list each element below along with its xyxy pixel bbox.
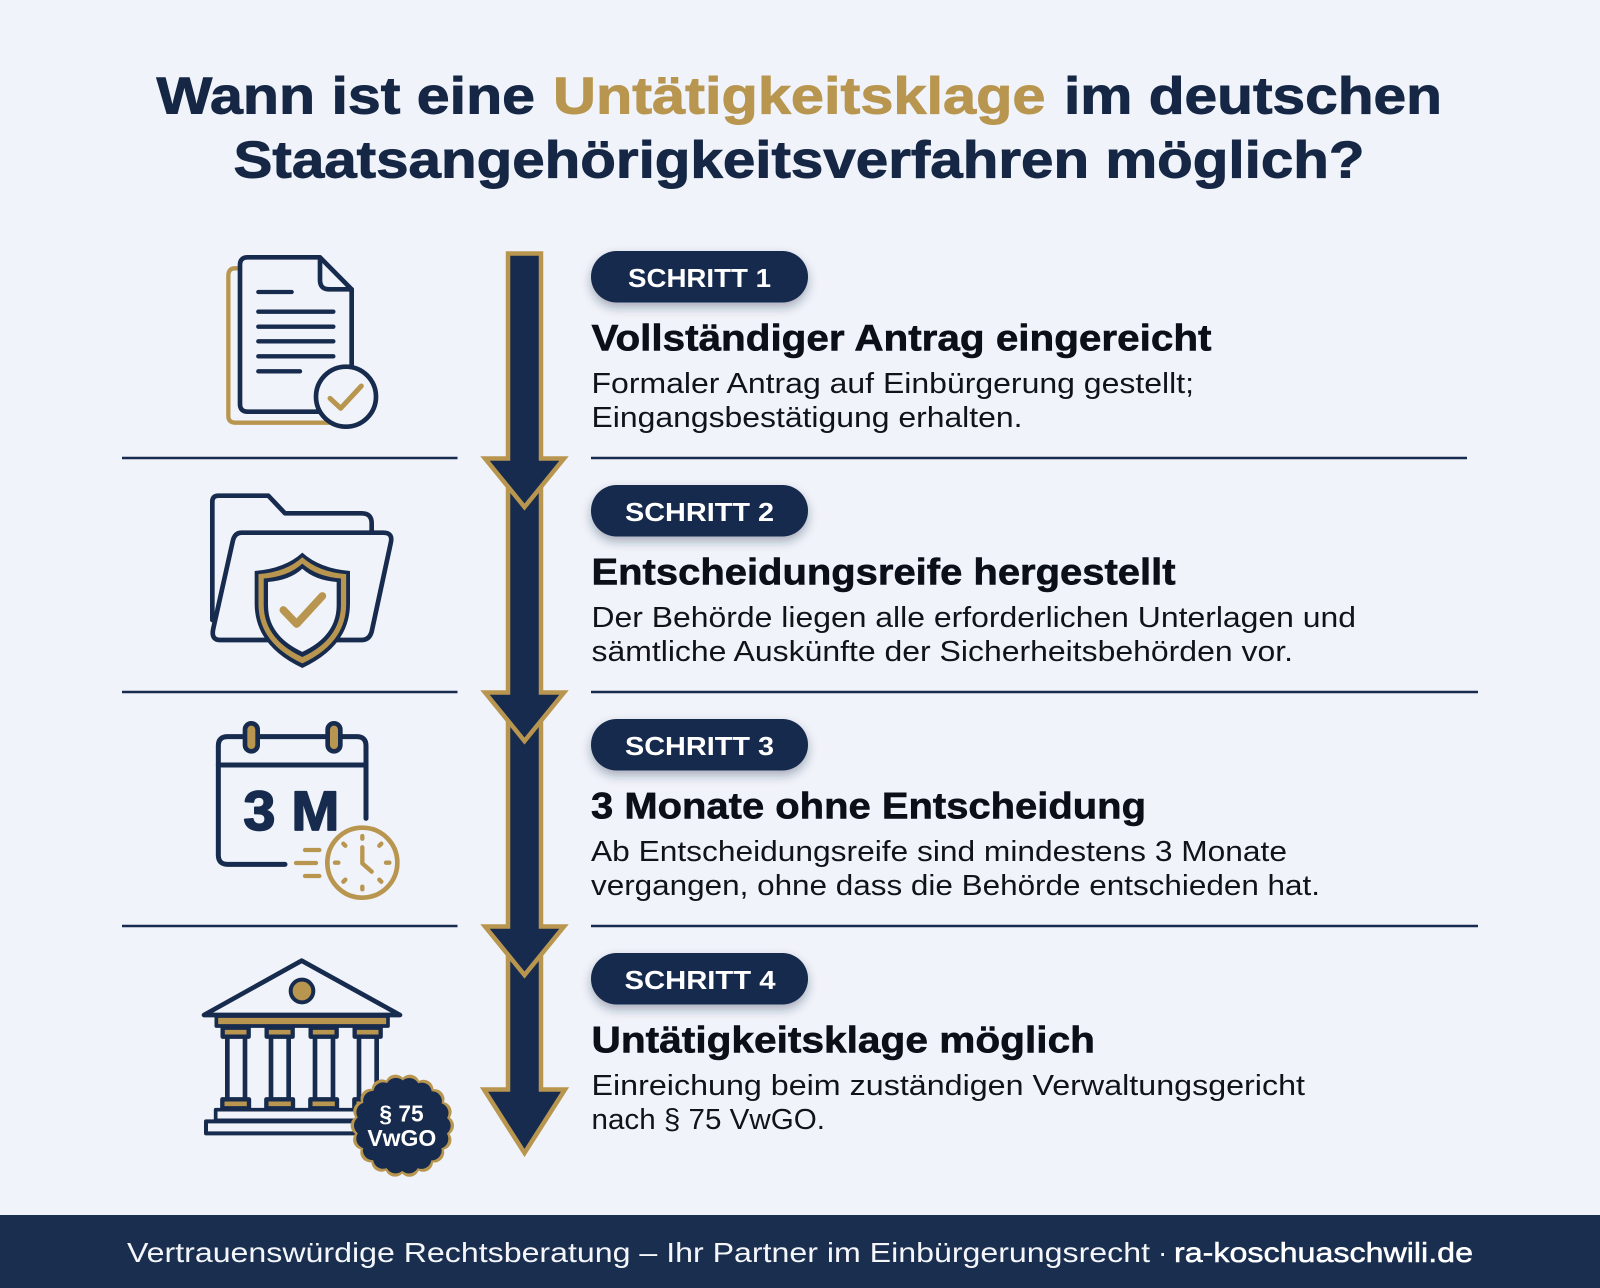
step 4 badge	[591, 953, 808, 1004]
process arrows	[484, 254, 565, 1153]
step 2 heading: Entscheidungsreife hergestellt	[592, 552, 1176, 592]
icon: calendar 3 months with clock	[218, 723, 397, 898]
icon: courthouse with VwGO seal: § 75	[379, 1101, 424, 1127]
title: im deutschen	[1064, 66, 1442, 124]
step 1 badge: SCHRITT 1	[628, 263, 771, 293]
step 3 description	[591, 836, 1320, 902]
step 3 badge: SCHRITT 3	[625, 731, 774, 761]
icon: folder with shield	[212, 496, 391, 668]
step 4 description	[592, 1070, 1305, 1136]
footer: ·	[1158, 1237, 1167, 1268]
footer: Vertrauenswürdige Rechtsberatung – Ihr Partner im Einbürgerungsrecht	[127, 1237, 1150, 1268]
icon: courthouse with VwGO seal	[204, 961, 444, 1167]
icon: courthouse with VwGO seal: VwGO	[367, 1125, 436, 1151]
step 3 description: vergangen, ohne dass die Behörde entschieden hat.	[591, 870, 1320, 902]
step 1	[591, 251, 1212, 434]
step 2 description: Der Behörde liegen alle erforderlichen Unterlagen und	[592, 602, 1356, 634]
footer: ra-koschuaschwili.de	[1174, 1237, 1473, 1268]
step 1 badge	[591, 251, 808, 302]
title: Wann ist eine	[156, 66, 535, 124]
step 2 description	[592, 602, 1356, 668]
step 2 badge: SCHRITT 2	[625, 497, 774, 527]
title: Staatsangehörigkeitsverfahren möglich?	[234, 130, 1364, 188]
step 3 description: Ab Entscheidungsreife sind mindestens 3 Monate	[591, 836, 1287, 868]
step 4 badge: SCHRITT 4	[624, 965, 776, 995]
step 4 heading: Untätigkeitsklage möglich	[592, 1020, 1095, 1060]
step 2 description: sämtliche Auskünfte der Sicherheitsbehörden vor.	[592, 636, 1293, 668]
step 1 description: Formaler Antrag auf Einbürgerung gestellt;	[592, 368, 1194, 400]
icon: calendar 3 months with clock: 3 M	[243, 780, 339, 842]
title	[156, 66, 1442, 188]
step 4 description: nach § 75 VwGO.	[592, 1104, 825, 1136]
step 2	[591, 485, 1356, 668]
step 3 badge	[591, 719, 808, 770]
step 3 heading: 3 Monate ohne Entscheidung	[591, 786, 1146, 826]
step 1 description: Eingangsbestätigung erhalten.	[592, 402, 1022, 434]
step 1 description	[592, 368, 1194, 434]
footer	[0, 1215, 1600, 1288]
title: Untätigkeitsklage	[553, 66, 1046, 124]
step 2 badge	[591, 485, 808, 536]
step 1 heading: Vollständiger Antrag eingereicht	[592, 318, 1212, 358]
step 4 description: Einreichung beim zuständigen Verwaltungsgericht	[592, 1070, 1305, 1102]
icon: document with check	[228, 257, 376, 427]
step 4	[591, 953, 1305, 1136]
step 3	[591, 719, 1320, 902]
